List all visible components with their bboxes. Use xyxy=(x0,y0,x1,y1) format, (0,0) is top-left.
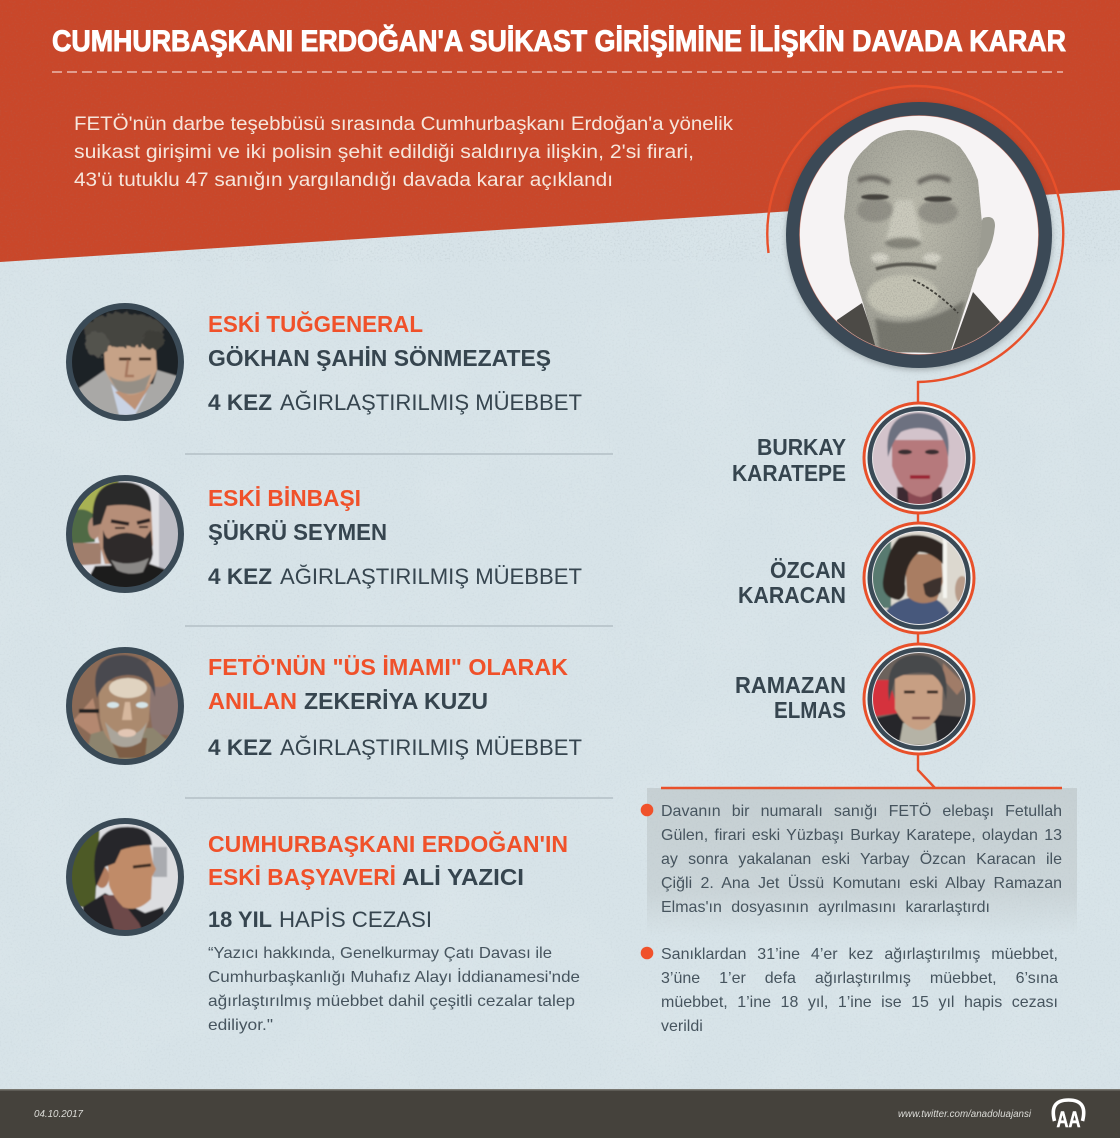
photo 3 xyxy=(66,647,184,765)
sentence 4: 18 YIL xyxy=(208,907,272,932)
text block: first summary paragraph: ay sonra yakalanan eski Yarbay Özcan Karacan ile xyxy=(661,851,1062,868)
text block: second summary paragraph xyxy=(661,946,1058,1035)
name xyxy=(732,434,846,486)
name 4: ESKİ BAŞYAVERİ xyxy=(208,864,396,890)
name 3 xyxy=(208,688,488,714)
role 2: ESKİ BİNBAŞI xyxy=(208,485,361,511)
sentence 2: AĞIRLAŞTIRILMIŞ MÜEBBET xyxy=(280,564,582,589)
quote: “Yazıcı hakkında, Genelkurmay Çatı Davası ile xyxy=(208,945,552,962)
name 4: ALİ YAZICI xyxy=(402,864,524,890)
logo: Anadolu Agency: AA xyxy=(1056,1107,1081,1132)
role 3: FETÖ'NÜN "ÜS İMAMI" OLARAK xyxy=(208,654,568,680)
name xyxy=(738,557,846,608)
name xyxy=(735,672,846,723)
quote: ağırlaştırılmış müebbet dahil çeşitli cezalar talep xyxy=(208,993,575,1010)
footer twitter link: www.twitter.com/anadoluajansi xyxy=(898,1109,1032,1120)
footer bar xyxy=(0,1089,1120,1138)
defendant 3: Zekeriya Kuzu xyxy=(66,647,582,765)
sentence 3: AĞIRLAŞTIRILMIŞ MÜEBBET xyxy=(280,735,582,760)
name 3: ZEKERİYA KUZU xyxy=(304,688,488,714)
name 4 xyxy=(208,864,524,890)
photo xyxy=(864,403,974,513)
defendant 1: Gökhan Şahin Sönmezateş xyxy=(66,303,582,421)
text block: second summary paragraph: 3’üne 1’er defa ağırlaştırılmış müebbet, 6’sına xyxy=(661,970,1058,987)
name: KARACAN xyxy=(738,582,846,608)
portrait: Fetullah Gülen (main circle) xyxy=(786,102,1052,368)
name: BURKAY xyxy=(757,434,846,460)
intro text xyxy=(74,114,734,191)
footer date: 04.10.2017 xyxy=(34,1109,83,1120)
name: RAMAZAN xyxy=(735,672,846,698)
photo 4 xyxy=(66,818,184,936)
intro text: 43'ü tutuklu 47 sanığın yargılandığı davada karar açıklandı xyxy=(74,170,613,191)
intro text: suikast girişimi ve iki polisin şehit edildiği saldırıya ilişkin, 2'si firari, xyxy=(74,142,694,163)
accused group: Burkay Karatepe xyxy=(732,403,974,513)
text block: second summary paragraph: Sanıklardan 31’ine 4’er kez ağırlaştırılmış müebbet, xyxy=(661,946,1058,963)
name: ELMAS xyxy=(774,697,846,723)
photo xyxy=(864,523,974,633)
bullet 2 xyxy=(641,947,653,959)
text block: first summary paragraph xyxy=(661,802,1062,916)
name: KARATEPE xyxy=(732,460,846,486)
quote xyxy=(208,945,580,1034)
photo xyxy=(864,644,974,754)
role 4: CUMHURBAŞKANI ERDOĞAN'IN xyxy=(208,830,568,857)
text block: first summary paragraph: Elmas'ın dosyasının ayrılmasını kararlaştırdı xyxy=(661,899,990,916)
connector: orange arc and timeline xyxy=(767,86,1063,788)
text block: first summary paragraph: Davanın bir numaralı sanığı FETÖ elebaşı Fetullah xyxy=(661,803,1062,820)
text block: second summary paragraph: verildi xyxy=(661,1018,703,1035)
name 2: ŞÜKRÜ SEYMEN xyxy=(208,519,387,545)
name 1: GÖKHAN ŞAHİN SÖNMEZATEŞ xyxy=(208,345,551,371)
sentence 4 xyxy=(208,907,432,932)
text block: second summary paragraph: müebbet, 1’ine 18 yıl, 1’ine ise 15 yıl hapis cezası xyxy=(661,994,1058,1011)
logo: Anadolu Agency xyxy=(1053,1100,1084,1132)
sentence 3: 4 KEZ xyxy=(208,735,272,760)
sentence 2: 4 KEZ xyxy=(208,564,272,589)
defendant 4: Ali Yazıcı xyxy=(66,818,580,1034)
photo 2 xyxy=(66,475,184,593)
sentence 4: HAPİS CEZASI xyxy=(279,907,432,932)
bullet 1 xyxy=(641,804,653,816)
sentence 1: 4 KEZ xyxy=(208,390,272,415)
photo 1 xyxy=(66,303,184,421)
quote: Cumhurbaşkanlığı Muhafız Alayı İddianamesi'nde xyxy=(208,967,580,986)
intro text: FETÖ'nün darbe teşebbüsü sırasında Cumhurbaşkanı Erdoğan'a yönelik xyxy=(74,114,734,135)
sentence 1: AĞIRLAŞTIRILMIŞ MÜEBBET xyxy=(280,390,582,415)
name 3: ANILAN xyxy=(208,688,297,714)
text block: first summary paragraph: Çiğli 2. Ana Jet Üssü Komutanı eski Albay Ramazan xyxy=(661,875,1062,892)
accused group: Özcan Karacan xyxy=(738,523,974,633)
role 1: ESKİ TUĞGENERAL xyxy=(208,310,423,337)
header band: slanted red banner xyxy=(0,0,1120,262)
defendant 2: Şükrü Seymen xyxy=(66,475,582,593)
name: ÖZCAN xyxy=(770,557,846,583)
accused group: Ramazan Elmas xyxy=(735,644,974,754)
quote: ediliyor." xyxy=(208,1017,273,1034)
text block: first summary paragraph: Gülen, firari eski Yüzbaşı Burkay Karatepe, olaydan 13 xyxy=(661,827,1062,844)
panel: summary shaded box xyxy=(647,788,1077,936)
